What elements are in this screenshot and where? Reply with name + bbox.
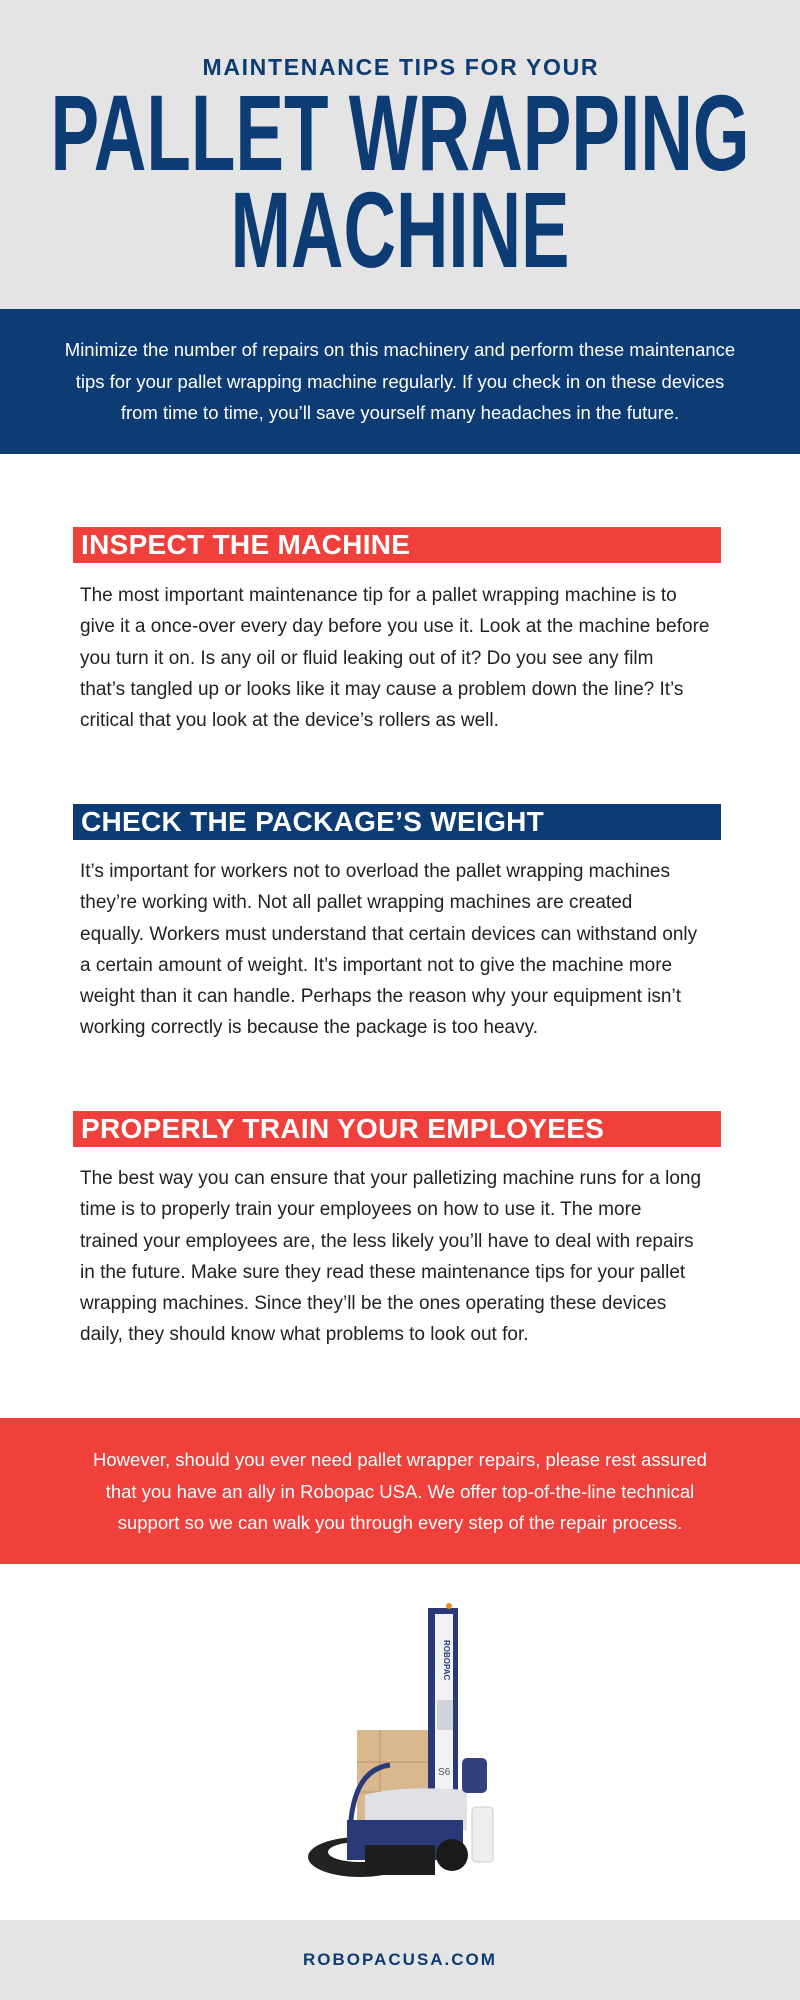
title: MAINTENANCE TIPS FOR YOUR [202, 54, 598, 80]
text: train: daily, they should know what problems to look out for. [80, 1324, 529, 1345]
text: weight: they’re working with. Not all pallet wrapping machines are created [80, 892, 632, 913]
heading: train employees: PROPERLY TRAIN YOUR EMPLOYEES [81, 1113, 604, 1144]
closing band: However, should you ever need pallet wrapper repairs, please rest assured [93, 1449, 707, 1470]
text: inspect: The most important maintenance tip for a pallet wrapping machine is to [80, 585, 677, 606]
column [428, 1603, 458, 1794]
closing band [0, 1418, 800, 1564]
text: weight: weight than it can handle. Perhaps the reason why your equipment isn’t [80, 986, 681, 1007]
intro band: from time to time, you’ll save yourself many headaches in the future. [121, 402, 679, 423]
title: MACHINE [230, 169, 570, 290]
boxes [357, 1730, 428, 1823]
base ring [308, 1837, 412, 1877]
text: weight: equally. Workers must understand that certain devices can withstand only [80, 924, 697, 945]
heading: inspect the machine [73, 527, 721, 563]
heading: check weight [73, 804, 721, 840]
text: train: trained your employees are, the less likely you’ll have to deal with repairs [80, 1231, 694, 1252]
intro band [0, 309, 800, 454]
text: inspect: you turn it on. Is any oil or fluid leaking out of it? Do you see any film [80, 648, 653, 669]
text: inspect: critical that you look at the device’s rollers as well. [80, 710, 499, 731]
film roll [462, 1758, 487, 1793]
closing band: that you have an ally in Robopac USA. We offer top-of-the-line technical [106, 1480, 694, 1502]
text: weight [80, 861, 697, 1038]
text: train [80, 1168, 701, 1345]
header panel [0, 0, 800, 309]
intro band: tips for your pallet wrapping machine regularly. If you check in on these devices [76, 370, 724, 392]
text: inspect [80, 585, 709, 731]
text: train: The best way you can ensure that your palletizing machine runs for a long [80, 1168, 701, 1189]
heading: inspect the machine: INSPECT THE MACHINE [81, 529, 410, 560]
footer: ROBOPACUSA.COM [303, 1950, 497, 1969]
column: S6 [438, 1767, 451, 1778]
footer [0, 1920, 800, 2000]
closing band: support so we can walk you through every step of the repair process. [118, 1512, 682, 1533]
heading: check weight: CHECK THE PACKAGE’S WEIGHT [81, 806, 544, 837]
arm [350, 1765, 390, 1840]
text: train: in the future. Make sure they read these maintenance tips for your pallet [80, 1262, 685, 1283]
title [50, 54, 750, 290]
illustration: pallet wrapping machine [308, 1603, 494, 1877]
text: weight: It’s important for workers not to overload the pallet wrapping machines [80, 861, 670, 882]
body [365, 1788, 467, 1830]
text: train: wrapping machines. Since they’ll be the ones operating these devices [80, 1293, 666, 1314]
text: weight: working correctly is because the package is too heavy. [80, 1017, 538, 1038]
column: ROBOPAC [442, 1640, 451, 1681]
heading: train employees [73, 1111, 721, 1147]
intro band: Minimize the number of repairs on this machinery and perform these maintenance [65, 339, 735, 360]
text: inspect: give it a once-over every day before you use it. Look at the machine before [80, 616, 709, 637]
text: weight: a certain amount of weight. It’s important not to give the machine more [80, 955, 672, 976]
text: inspect: that’s tangled up or looks like it may cause a problem down the line? It’s [80, 679, 683, 700]
text: train: time is to properly train your employees on how to use it. The more [80, 1199, 641, 1220]
